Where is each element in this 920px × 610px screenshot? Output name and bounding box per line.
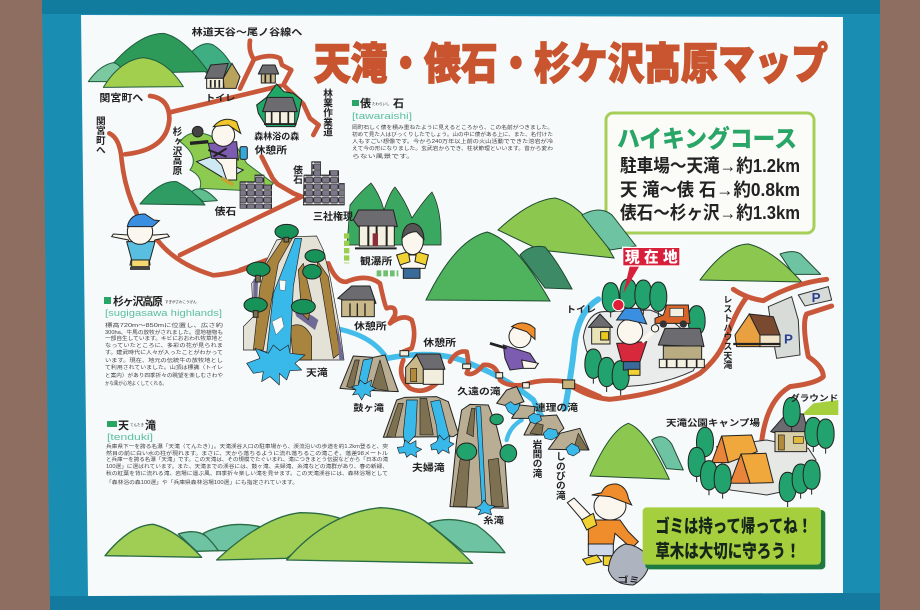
current location pin dot — [613, 299, 624, 311]
text block: tendaki: と兵庫一を誇る名瀑「天滝」です。この天滝は、その規模でたぐいまれ、滝につきまとう伝説などから「日本の滝 — [106, 455, 389, 463]
garbage bag — [608, 544, 650, 585]
text block: tawaraishi: 石 — [393, 97, 404, 110]
parking area 1: P — [812, 290, 821, 305]
text block: tawaraishi — [352, 96, 554, 160]
label: campsite: 天滝公園キャンプ場 — [666, 417, 760, 428]
label: ground: グラウンド — [790, 393, 838, 403]
icon: log cabin — [658, 328, 704, 368]
label: rest area left: 休憩所 — [354, 320, 387, 332]
parking area 2: P — [784, 331, 793, 346]
text block: tawaraishi: 人もすごい想像です。今から240万年以上前の火山活動でできた溶岩が冷 — [352, 137, 554, 145]
label: rest house vertical: レストハウス天滝 — [722, 295, 732, 370]
icon: small hut — [258, 65, 279, 83]
text block: tawaraishi: たわらいし — [372, 101, 390, 106]
icon: car — [655, 305, 690, 328]
trees: campsite — [688, 397, 834, 507]
text block: sugigasawa highlands: なっていたところに、多彩の花が見られま — [105, 341, 223, 349]
label: iwama falls: 岩間の滝 — [530, 439, 542, 479]
label: sugigasawa vertical: 杉ヶ沢高原 — [170, 126, 182, 176]
course distance 2: 天 滝～俵 石→約0.8km — [620, 180, 800, 200]
river: central stream — [340, 329, 542, 440]
waterfall: tsuzumi — [340, 355, 398, 400]
trees behind shrine — [347, 183, 441, 245]
small cascades — [497, 387, 589, 456]
hill: light green rear — [498, 198, 614, 258]
text block: tendaki: 天 — [118, 419, 129, 432]
label: tawaraishi lower: 俵石 — [215, 205, 236, 218]
parking area 2 — [768, 297, 800, 358]
cleanup banner — [643, 507, 825, 569]
camp ground — [717, 440, 816, 495]
label: toilet: トイレ — [205, 93, 235, 103]
label: rest area: 休憩所 — [255, 145, 287, 157]
section: central hills — [426, 198, 636, 301]
bridge — [563, 380, 575, 389]
label: ito falls: 糸滝 — [483, 514, 504, 525]
label: tawaraishi vertical: 俵石 — [291, 164, 303, 185]
text block: sugigasawa highlands: す。建武時代に人々が入ったことがわかって — [105, 348, 223, 356]
label: forestry road: 林業作業道 — [321, 88, 333, 137]
label: renri falls: 連理の滝 — [535, 402, 579, 414]
garbage bag: ゴミ — [617, 575, 640, 585]
text block: tendaki: 然目の前に白い水の柱が現れます。まさに、天から落ちるように流れ落ちるこの滝こそ、落差98メートル — [106, 449, 389, 457]
label: rindo: 林道天谷～尾ノ谷線へ — [192, 26, 303, 38]
sugigasawa green meadow — [180, 133, 273, 192]
label: tendaki: 天滝 — [306, 367, 328, 379]
text block: sugigasawa highlands: すぎがさわこうげん — [165, 299, 197, 304]
trees: location top — [602, 279, 667, 317]
hill: big green — [426, 232, 550, 301]
illustration: boy with blue cap — [112, 214, 169, 270]
icon: shrine — [347, 210, 398, 273]
label: sekinomiya vertical: 関宮町へ — [94, 116, 106, 155]
text block: tendaki: 100選」に選ばれています。また、天滝までの渓谷には、鼓ヶ滝、夫婦滝、糸滝などの滝群があり、春の新緑、 — [106, 462, 388, 470]
section: right side map — [563, 244, 838, 507]
illustration: boy with blue hat, current location — [617, 308, 659, 375]
text block: sugigasawa highlands: [sugigasawa highlands] — [105, 308, 222, 318]
label: forest: 森林浴の森 — [254, 130, 299, 141]
text block: tendaki: 兵庫県下一を誇る名瀑「天滝（てんたき）」。天滝渓谷入口の駐車場から、渓流沿いの歩道を約1.2km登ると、突 — [106, 442, 389, 450]
upper left hills — [88, 33, 235, 205]
route: central trail — [240, 260, 600, 397]
illustration: running hiker — [490, 323, 538, 370]
illustration: sitting hiker with yellow hat — [190, 119, 247, 185]
label: kuon falls: 久遠の滝 — [457, 386, 501, 397]
route: right trails — [567, 279, 832, 442]
river: toilet side — [565, 299, 598, 408]
label: sansha gongen: 三社権現 — [313, 210, 353, 223]
label: sekinomiya: 関宮町へ — [99, 91, 143, 104]
text block: tawaraishi: 初めて見た人はびっくりしたでしょう。山の中に俵がある上に、また、名付けた — [352, 130, 553, 138]
text block: sugigasawa highlands: います。現在、地元の伝統牛の放牧地とし — [105, 356, 223, 364]
waterfall: ito — [450, 404, 517, 515]
icon: rest hut lower — [406, 354, 445, 384]
title: 天滝・俵石・杉ケ沢高原マップ — [314, 41, 828, 89]
text block: tendaki — [106, 418, 389, 486]
text block: tawaraishi: 岡町石しく俵を積み重ねたように見えるところから、この名前がつきました。 — [352, 123, 553, 131]
hills: upper right — [700, 244, 821, 282]
map panel — [81, 15, 843, 596]
section: cleanup message — [567, 484, 825, 585]
hiking course heading: ハイキングコース — [617, 125, 797, 153]
icon: forest rest house — [257, 84, 302, 127]
waterfall: meoto — [383, 397, 458, 457]
bridges on trail — [400, 351, 574, 388]
text block: sugigasawa highlands: 杉ヶ沢高原 — [113, 294, 163, 308]
icon: camp cabin — [771, 413, 809, 452]
text block: tawaraishi: 俵 — [360, 96, 371, 110]
text block: tendaki: 「森林浴の森100選」や「兵庫県森林浴場100選」にも指定されています。 — [106, 478, 298, 486]
text block: tendaki: 滝 — [145, 418, 156, 432]
icon: tawaraishi bale stack lower — [240, 175, 272, 208]
text block: sugigasawa highlands: 標高720m～850mに位置し、広さ約 — [105, 321, 223, 329]
text block: tendaki: てんたき — [130, 422, 144, 427]
hill: dark teal — [520, 246, 572, 289]
label: toilet at location: トイレ — [566, 305, 596, 315]
banner line 2: 草木は大切に守ろう！ — [655, 540, 800, 561]
current location callout — [623, 247, 680, 293]
icon: toilet building — [205, 63, 240, 88]
icon: toilet at location — [588, 314, 613, 344]
illustration: hiker with garbage bag — [567, 484, 638, 567]
section: waterfalls and central route — [240, 210, 600, 525]
icon: rest house tendaki — [733, 314, 781, 347]
hills: lower — [590, 423, 683, 479]
text block: tendaki: 秋の紅葉を背に流れる滝、岩場に運ぶ風、四季折々楽しい滝を見せます。この天滝渓谷には、森林浴場として — [106, 469, 388, 477]
course distance 1: 駐車場～天滝→約1.2km — [620, 156, 800, 176]
parking area 1 — [798, 287, 832, 306]
illustration: boy at shrine — [397, 223, 428, 278]
icon: tawaraishi bale stack upper — [303, 162, 344, 205]
bottom hills — [105, 508, 505, 563]
waterfall: tendaki — [243, 224, 344, 385]
icon: tents — [712, 435, 773, 483]
label: shinobi falls: しのびの滝 — [554, 452, 566, 501]
trees: location bottom — [585, 306, 705, 395]
banner line 1: ゴミは持って帰ってね！ — [655, 516, 812, 537]
label: meoto falls: 夫婦滝 — [412, 462, 445, 474]
text block: sugigasawa highlands: て利用されていました。山頂は標識（トイレ — [105, 363, 223, 371]
course distance 3: 俵石～杉ヶ沢→約1.3km — [620, 203, 800, 223]
route: upper left trails — [109, 41, 319, 275]
icon: rest hut upper — [338, 286, 376, 317]
current location callout: 現在地 — [625, 248, 678, 266]
label: kanbakusho: 観瀑所 — [360, 256, 393, 268]
text block: tawaraishi: えて今の形になりました。玄武岩からでき、柱状節理といいます。昔から変わ — [352, 144, 553, 152]
text block: sugigasawa highlands: かな風が心地よくしてくれる。 — [105, 379, 167, 387]
label: tsuzumi falls: 鼓ヶ滝 — [353, 402, 385, 413]
text block: sugigasawa highlands: 300ha、牛馬の放牧がされました。湿地植物も — [105, 328, 223, 336]
text block: tawaraishi: らない風景です。 — [352, 153, 414, 160]
text block: tendaki: [tenduki] — [107, 432, 153, 442]
text block: sugigasawa highlands — [104, 294, 223, 387]
hill: teal rear — [582, 210, 636, 250]
text block: sugigasawa highlands: 一部自生しています。キビにおおわれ牧草地と — [105, 334, 223, 342]
text block: sugigasawa highlands: と案内）があり四季折々の眺望を楽しむさわや — [105, 371, 223, 379]
label: rest area middle: 休憩所 — [423, 337, 456, 349]
hiking course box — [606, 113, 814, 233]
current location grounds — [583, 310, 700, 387]
text block: tawaraishi: [tawaraishi] — [352, 111, 412, 121]
section: upper left map — [88, 26, 344, 275]
ground hill — [802, 400, 838, 415]
